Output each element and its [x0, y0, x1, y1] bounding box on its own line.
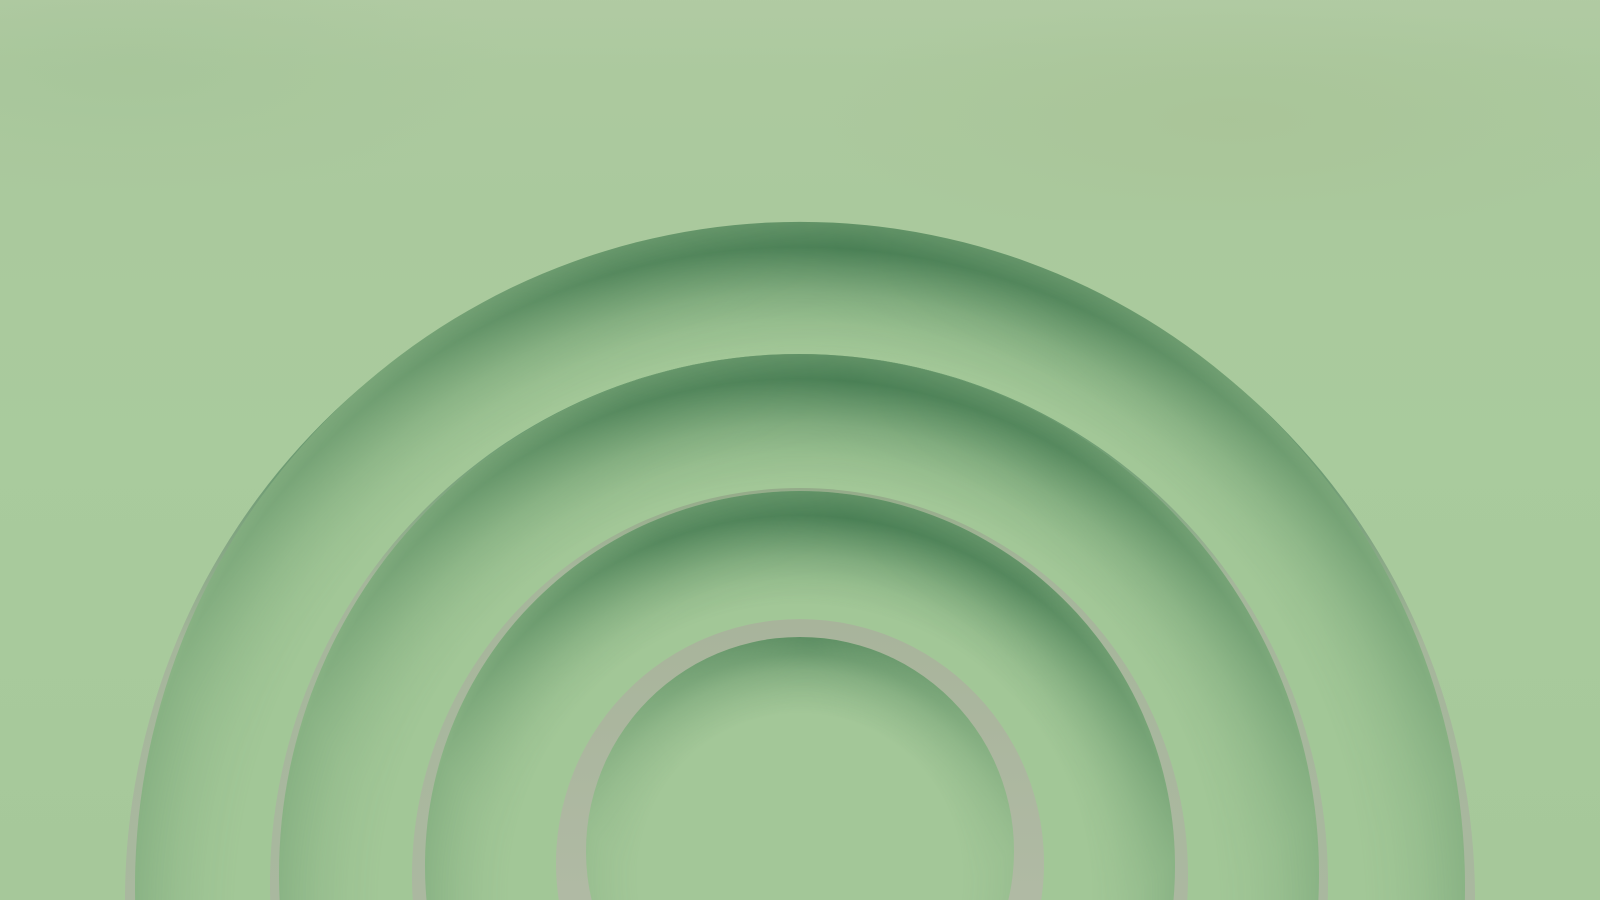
illustration: concentric recessed arches [125, 222, 1475, 900]
ring 4: central disc with thick wall [556, 619, 1044, 900]
ring 1: outermost recess [125, 222, 1475, 900]
ring 3: third recess [412, 488, 1188, 900]
ring 2: second recess [270, 354, 1328, 900]
